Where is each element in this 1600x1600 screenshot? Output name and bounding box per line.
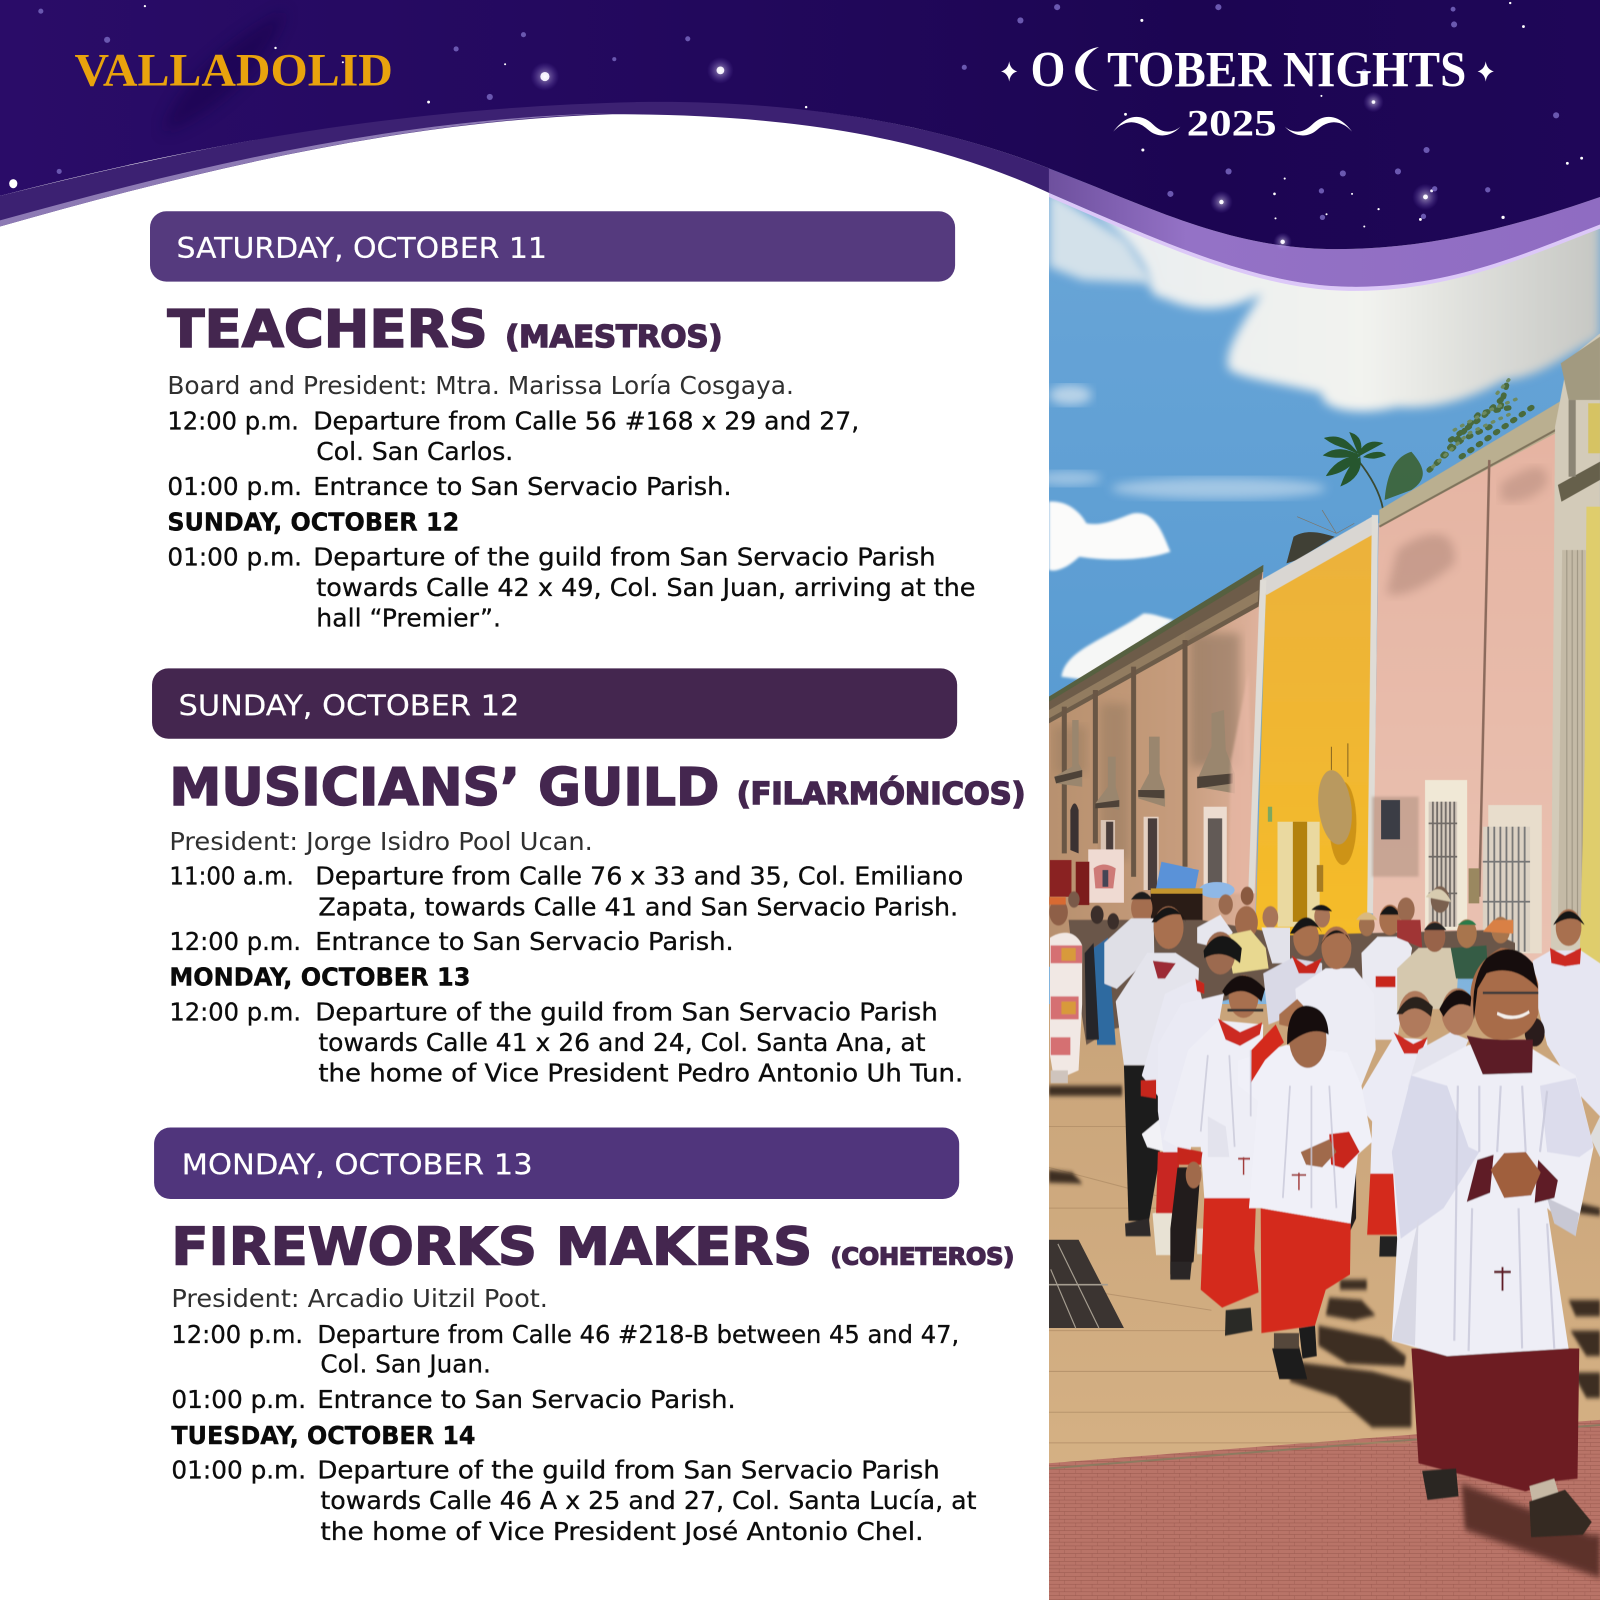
schedule: towards Calle 46 A x 25 and 27, Col. Santa Lucía, at (320, 1486, 977, 1515)
woman in huipil (1050, 933, 1082, 1076)
president: President: Jorge Isidro Pool Ucan. (169, 827, 593, 856)
schedule: 01:00 p.m. (167, 472, 302, 501)
president: President: Arcadio Uitzil Poot. (171, 1284, 548, 1313)
schedule: Departure of the guild from San Servacio Parish (317, 1456, 940, 1485)
schedule: Entrance to San Servacio Parish. (317, 1385, 736, 1414)
window 1 (1425, 780, 1467, 930)
door (1278, 822, 1320, 927)
schedule: 01:00 p.m. (171, 1385, 306, 1414)
boy 3 (1142, 979, 1208, 1096)
schedule: 11:00 a.m. (169, 862, 294, 891)
photo sky (1049, 153, 1600, 1071)
schedule (171, 1320, 977, 1546)
schedule: 01:00 p.m. (167, 542, 302, 571)
window 2 (1488, 805, 1542, 953)
white left panel (0, 102, 1049, 1600)
subheading: (FILARMÓNICOS) (737, 775, 1026, 812)
stars (9, 2, 1583, 244)
swash left (1113, 117, 1181, 135)
schedule: 12:00 p.m. (171, 1320, 303, 1349)
date bar (152, 668, 957, 739)
schedule: Col. San Juan. (320, 1349, 491, 1378)
yellow wall frame (1261, 515, 1375, 595)
sparkle left (1001, 61, 1017, 82)
logo crescent moon C (1075, 47, 1099, 91)
boy in white shirt back (1131, 893, 1153, 923)
schedule: 12:00 p.m. (169, 927, 301, 956)
panel: fireworks makers (154, 1128, 1014, 1546)
schedule (167, 407, 976, 633)
title: Valladolid: VALLADOLID (74, 45, 393, 97)
schedule: TUESDAY, OCTOBER 14 (171, 1421, 476, 1450)
altar boys and crowd (1049, 886, 1600, 1537)
boy 7 (1361, 1037, 1428, 1175)
swash right (1285, 117, 1352, 135)
photo: procession in Valladolid street (1036, 153, 1600, 1600)
schedule: towards Calle 41 x 26 and 24, Col. Santa Ana, at (318, 1028, 926, 1057)
year: 2025 (1187, 103, 1277, 144)
pink strip beside yellow (1228, 670, 1254, 893)
sparkle right (1478, 61, 1494, 82)
disc (1329, 782, 1356, 865)
schedule: hall “Premier”. (316, 604, 501, 633)
back-center boy white shirt (1295, 968, 1376, 1086)
date label: SATURDAY, OCTOBER 11 (177, 231, 547, 265)
banners (1088, 849, 1124, 903)
blue-dressed people (1094, 938, 1116, 1045)
date label: MONDAY, OCTOBER 13 (182, 1147, 533, 1181)
schedule (169, 862, 963, 1088)
yellow wall (1254, 533, 1373, 967)
heading: TEACHERS (167, 300, 488, 360)
heading: MUSICIANS’ GUILD (169, 758, 719, 818)
subheading: (COHETEROS) (831, 1242, 1014, 1270)
schedule: SUNDAY, OCTOBER 12 (167, 508, 459, 537)
heading: FIREWORKS MAKERS (171, 1217, 812, 1277)
schedule: 12:00 p.m. (167, 407, 299, 436)
schedule: Zapata, towards Calle 41 and San Servacio Parish. (318, 892, 958, 921)
date bar (154, 1128, 959, 1199)
electric box (1469, 868, 1479, 903)
schedule: 12:00 p.m. (169, 997, 301, 1026)
logo text: TOBER NIGHTS (1107, 43, 1466, 99)
schedule: Departure of the guild from San Servacio Parish (315, 997, 938, 1026)
shadows (1049, 1086, 1600, 1428)
schedule: 01:00 p.m. (171, 1456, 306, 1485)
schedule: the home of Vice President Pedro Antonio Uh Tun. (318, 1059, 963, 1088)
brown wall (1049, 568, 1263, 967)
pillar (1551, 333, 1600, 977)
schedule: MONDAY, OCTOBER 13 (169, 963, 470, 992)
header band: right lilac wave (1049, 168, 1600, 291)
schedule: Departure of the guild from San Servacio Parish (313, 542, 936, 571)
header band: pale edge (0, 113, 612, 227)
tall boy white shirt (1116, 953, 1199, 1065)
header band: left curve (0, 100, 1049, 227)
schedule: Entrance to San Servacio Parish. (315, 927, 734, 956)
boy 8 (1408, 1032, 1469, 1127)
schedule: the home of Vice President José Antonio Chel. (320, 1517, 923, 1546)
right back boy (1533, 951, 1600, 1116)
boy 5 (1163, 1020, 1263, 1198)
logo: October Nights 2025 (1001, 43, 1494, 144)
far yellow wall (1579, 507, 1600, 977)
schedule: Col. San Carlos. (316, 437, 513, 466)
panel: musicians (152, 668, 1026, 1088)
schedule: Departure from Calle 56 #168 x 29 and 27, (313, 407, 859, 436)
boy 4 (1158, 994, 1224, 1152)
date label: SUNDAY, OCTOBER 12 (179, 688, 519, 722)
clouds (1036, 180, 1600, 680)
main altar boy (1411, 1348, 1579, 1491)
background crowd (1069, 920, 1515, 1045)
panel: teachers (150, 211, 976, 633)
plaque (1381, 800, 1400, 839)
trees on roof (1286, 377, 1533, 563)
logo text O: O (1031, 43, 1065, 99)
buildings (1049, 333, 1600, 977)
night sky header (0, 0, 1600, 251)
center boy (1238, 1045, 1372, 1223)
street pavement (1049, 1004, 1600, 1600)
pink wall (1372, 422, 1561, 967)
schedule: Entrance to San Servacio Parish. (313, 472, 732, 501)
schedule: towards Calle 42 x 49, Col. San Juan, arriving at the (316, 573, 976, 602)
schedule: Departure from Calle 76 x 33 and 35, Col. Emiliano (315, 862, 963, 891)
schedule: Departure from Calle 46 #218-B between 45 and 47, (317, 1320, 959, 1349)
subheading: (MAESTROS) (505, 320, 722, 355)
floor grate (1049, 1240, 1124, 1328)
date bar (150, 211, 955, 282)
president: Board and President: Mtra. Marissa Loría Cosgaya. (167, 371, 794, 400)
center-back people (1197, 915, 1233, 948)
